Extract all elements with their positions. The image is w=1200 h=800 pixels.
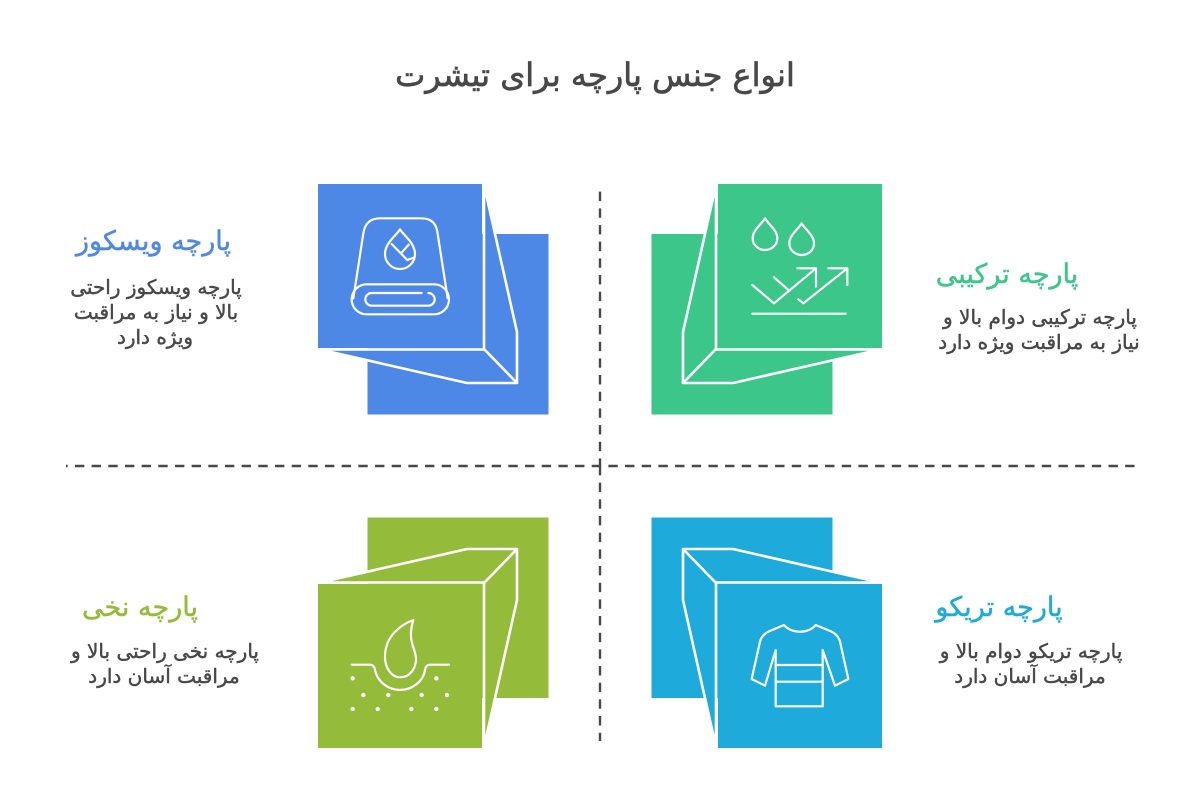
title: انواع جنس پارچه برای تیشرت bbox=[395, 56, 795, 94]
icon: drop on soil bbox=[350, 620, 449, 711]
panel: cotton fabric bbox=[70, 518, 548, 748]
tricot description bbox=[939, 639, 1122, 688]
cotton folded side bbox=[320, 549, 517, 747]
cotton front square bbox=[318, 584, 482, 748]
icon: drops and arrows bbox=[752, 218, 847, 314]
viscose description: پارچه ویسکوز راحتی bbox=[70, 275, 242, 300]
blended front square bbox=[718, 184, 882, 348]
cotton fold edge bbox=[484, 549, 517, 583]
viscose folded side bbox=[320, 185, 517, 383]
tricot description: مراقبت آسان دارد bbox=[954, 663, 1106, 688]
tricot heading: پارچه تریکو bbox=[933, 592, 1063, 623]
blended description bbox=[938, 305, 1140, 354]
tricot folded side bbox=[683, 549, 880, 747]
blended fold edge bbox=[683, 349, 716, 383]
tricot description: پارچه تریکو دوام بالا و bbox=[939, 639, 1122, 664]
cotton back square bbox=[368, 518, 548, 698]
panel: viscose fabric bbox=[70, 184, 548, 414]
blended back square bbox=[652, 234, 832, 414]
viscose front square bbox=[318, 184, 482, 348]
cotton description bbox=[70, 639, 259, 688]
viscose fold edge bbox=[484, 349, 517, 383]
viscose description: ویژه دارد bbox=[117, 325, 193, 349]
icon: towel with drop bbox=[352, 218, 449, 314]
blended heading: پارچه ترکیبی bbox=[936, 259, 1078, 290]
cotton description: مراقبت آسان دارد bbox=[88, 663, 240, 688]
viscose heading: پارچه ویسکوز bbox=[74, 226, 231, 257]
panel: tricot fabric bbox=[652, 518, 1122, 748]
cotton description: پارچه نخی راحتی بالا و bbox=[70, 639, 259, 664]
blended description: نیاز به مراقبت ویژه دارد bbox=[938, 330, 1140, 354]
tricot fold edge bbox=[683, 549, 716, 583]
viscose description bbox=[70, 275, 242, 349]
blended folded side bbox=[683, 185, 880, 383]
viscose description: بالا و نیاز به مراقبت bbox=[74, 300, 238, 324]
viscose back square bbox=[368, 234, 548, 414]
tricot back square bbox=[652, 518, 832, 698]
cotton heading: پارچه نخی bbox=[82, 592, 198, 623]
icon: striped sweater bbox=[752, 625, 848, 706]
blended description: پارچه ترکیبی دوام بالا و bbox=[942, 305, 1137, 330]
tricot front square bbox=[718, 584, 882, 748]
panel: blended fabric bbox=[652, 184, 1140, 414]
